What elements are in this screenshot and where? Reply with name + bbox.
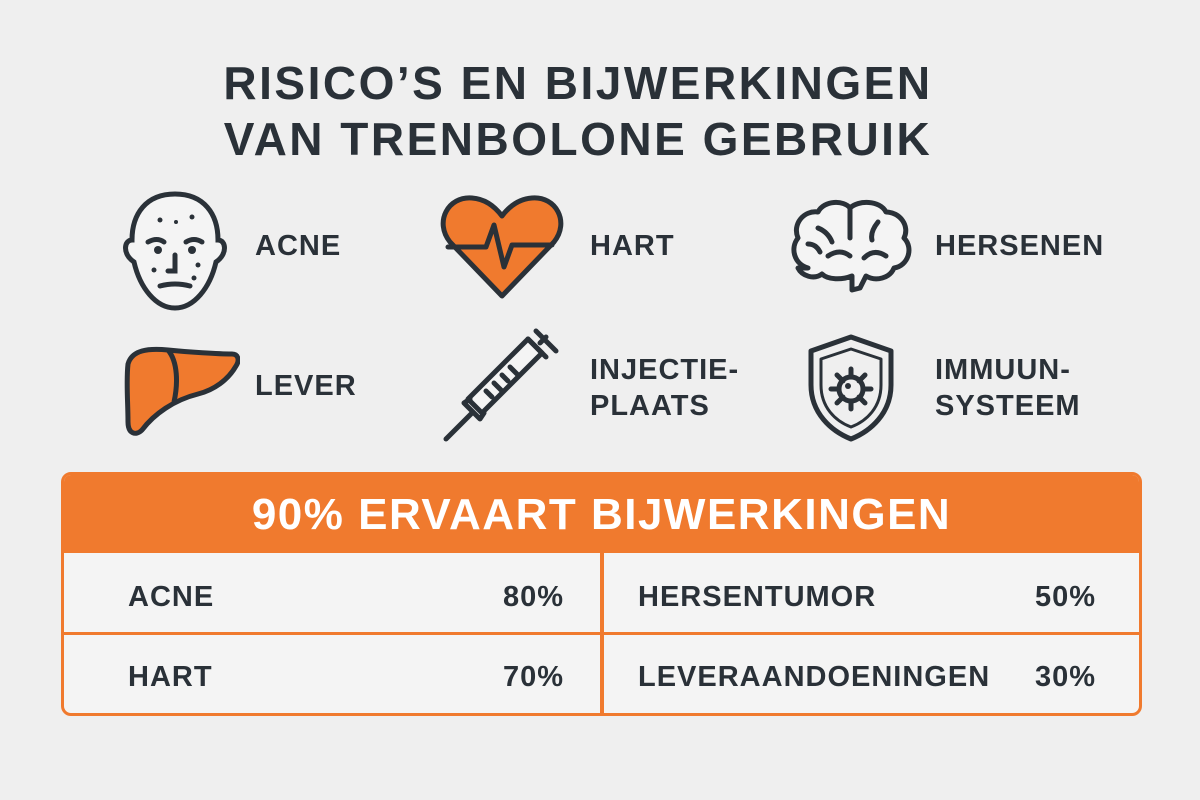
row: acne xyxy=(128,581,564,613)
label: immuunsysteem: SYSTEEM xyxy=(935,390,1081,422)
icon: shield virus xyxy=(808,334,894,442)
title: RISICO’S EN BIJWERKINGEN xyxy=(223,57,933,109)
label: injectieplaats: INJECTIE- xyxy=(590,354,739,386)
label: acne: ACNE xyxy=(255,230,341,262)
row: hersentumor: HERSENTUMOR xyxy=(638,581,876,613)
label: hart: HART xyxy=(590,230,675,262)
row: hart xyxy=(128,661,564,693)
panel: statistics table xyxy=(61,472,1142,716)
label: immuunsysteem xyxy=(935,354,1081,422)
icon: syringe xyxy=(444,328,558,442)
row: acne: ACNE xyxy=(128,581,214,613)
label: lever: LEVER xyxy=(255,370,357,402)
row: hersentumor xyxy=(638,581,1096,613)
row: leveraandoeningen: LEVERAANDOENINGEN xyxy=(638,661,990,693)
row: acne: 80% xyxy=(503,581,564,613)
row: hart: 70% xyxy=(503,661,564,693)
label: injectieplaats xyxy=(590,354,739,422)
title xyxy=(223,57,933,165)
row: leveraandoeningen: 30% xyxy=(1035,661,1096,693)
icon: liver xyxy=(124,346,240,436)
icon: brain xyxy=(791,200,912,292)
row: hersentumor: 50% xyxy=(1035,581,1096,613)
icon: heart xyxy=(440,195,564,298)
table header: 90% ERVAART BIJWERKINGEN xyxy=(252,490,951,539)
label: hersenen: HERSENEN xyxy=(935,230,1104,262)
label: injectieplaats: PLAATS xyxy=(590,390,710,422)
icon: face acne xyxy=(123,192,227,310)
title: VAN TRENBOLONE GEBRUIK xyxy=(224,113,932,165)
row: hart: HART xyxy=(128,661,213,693)
table header xyxy=(64,475,1139,553)
label: immuunsysteem: IMMUUN- xyxy=(935,354,1071,386)
